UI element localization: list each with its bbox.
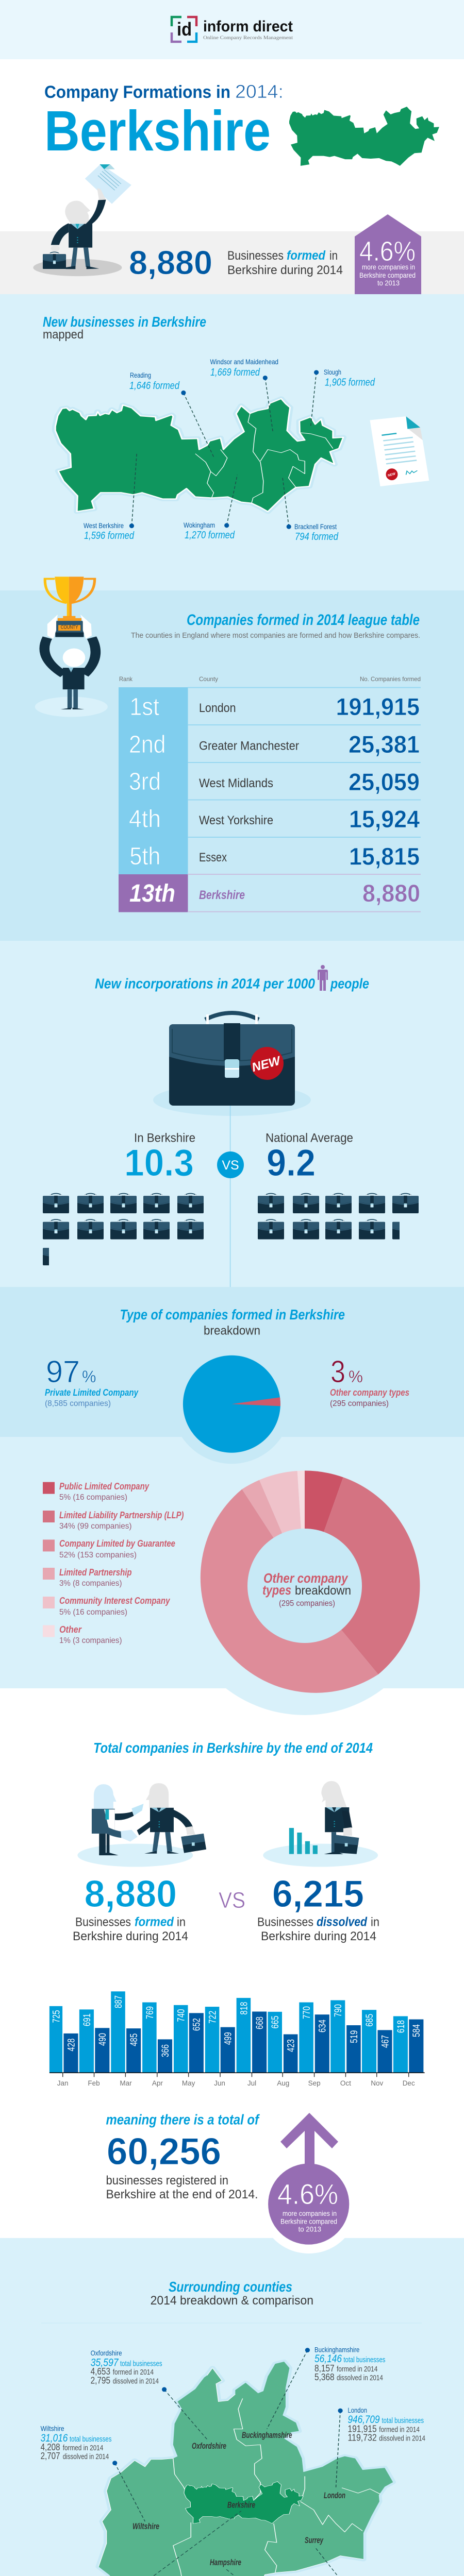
- comparison: incorporations in Berkshire vs national: 9.2: [267, 1142, 316, 1184]
- pie chart: company type split: [172, 1344, 291, 1464]
- bar chart: monthly formed and dissolved: 423: [286, 2039, 297, 2052]
- stat: formed vs dissolved: Berkshire during 2014: [73, 1929, 188, 1943]
- legend: other company types: Company Limited by Guarantee: [59, 1538, 175, 1549]
- info: London: 946,709: [347, 2414, 380, 2426]
- bar chart: monthly formed and dissolved: 722: [207, 2011, 218, 2024]
- bar chart: monthly formed and dissolved: 499: [223, 2032, 234, 2045]
- bar chart: monthly formed and dissolved: 691: [82, 2013, 93, 2026]
- map labels: districts formed counts: 1,905 formed: [325, 377, 375, 388]
- title: Berkshire: [44, 99, 271, 163]
- heading: companies formed league table: The counties in England where most companies are formed and how Berkshire compares.: [131, 631, 420, 640]
- info: Oxfordshire: formed in 2014: [113, 2368, 154, 2377]
- heading: companies formed league table: [131, 612, 420, 640]
- map: surrounding counties: [97, 2348, 393, 2576]
- info: London: formed in 2014: [379, 2426, 420, 2434]
- stat: 8,880 businesses formed: Businesses: [227, 249, 284, 263]
- table: companies formed in 2014: County: [199, 675, 218, 683]
- map labels: districts formed counts: 1,270 formed: [185, 530, 235, 541]
- map labels: districts formed counts: Bracknell Forest: [294, 522, 337, 531]
- info: Buckinghamshire: 5,368: [314, 2372, 335, 2382]
- comparison: incorporations in Berkshire vs national: National Average: [266, 1131, 353, 1145]
- info: Wiltshire: total businesses: [70, 2435, 111, 2444]
- bar chart: monthly formed and dissolved: Dec: [403, 2079, 415, 2087]
- info: Wiltshire: 4,208: [41, 2442, 60, 2452]
- bar chart: monthly formed and dissolved: 428: [66, 2039, 77, 2052]
- heading: type of companies: Type of companies formed in Berkshire: [120, 1307, 345, 1323]
- title: 2014:: [235, 81, 284, 102]
- bar chart: monthly formed and dissolved: Jan: [57, 2079, 69, 2087]
- map labels: county names: London: [324, 2490, 345, 2500]
- stat: total of 60,256: meaning there is a total of: [106, 2112, 260, 2128]
- stat: 3% other company types: [330, 1354, 409, 1408]
- stat: formed vs dissolved: Businesses: [257, 1916, 313, 1929]
- bar chart: monthly formed and dissolved: Oct: [340, 2079, 351, 2087]
- legend: other company types: [43, 1481, 184, 1645]
- bar chart: monthly formed and dissolved: May: [182, 2079, 195, 2087]
- callout: 4.6% more companies: to 2013: [377, 279, 400, 287]
- map labels: districts formed counts: Slough: [324, 368, 341, 376]
- bar chart: monthly formed and dissolved: 519: [349, 2030, 360, 2043]
- callout: 4.6% more companies: 4.6%: [359, 236, 416, 267]
- stat: 97% private limited: Private Limited Company: [45, 1387, 139, 1398]
- table: companies formed in 2014: Essex: [199, 851, 227, 865]
- table: companies formed in 2014: 3rd: [129, 768, 161, 795]
- comparison: incorporations in Berkshire vs national: [124, 1106, 353, 1287]
- callout: 4.6% more companies: [355, 214, 421, 294]
- info: Oxfordshire: dissolved in 2014: [113, 2377, 159, 2385]
- table: companies formed in 2014: 15,924: [349, 805, 420, 833]
- map labels: county names: Oxfordshire: [192, 2441, 226, 2451]
- info: Buckinghamshire: 8,157: [314, 2363, 335, 2374]
- map labels: county names: Surrey: [305, 2535, 324, 2545]
- icon: big new briefcase: [153, 1013, 311, 1116]
- map labels: county names: [132, 2430, 345, 2567]
- map labels: districts formed counts: Windsor and Maidenhead: [210, 358, 278, 366]
- legend: other company types: Limited Liability Partnership (LLP): [59, 1510, 184, 1520]
- icon: Berkshire map silhouette: [289, 107, 439, 166]
- icon: new document: [370, 416, 429, 486]
- map labels: county names: Wiltshire: [132, 2521, 159, 2531]
- stat: formed vs dissolved: [73, 1873, 379, 1943]
- info: Buckinghamshire: 56,146: [314, 2353, 342, 2365]
- stat: 8,880 businesses formed: [129, 244, 343, 281]
- table: companies formed in 2014: [119, 675, 421, 912]
- stat: 3% other company types: %: [349, 1367, 363, 1386]
- bar chart: monthly formed and dissolved: 887: [113, 1995, 124, 2008]
- heading: surrounding counties: Surrounding counties: [169, 2279, 292, 2295]
- comparison: incorporations in Berkshire vs national: 10.3: [124, 1142, 194, 1184]
- stat: 97% private limited: [45, 1354, 139, 1408]
- icon: big new briefcase: NEW: [251, 1054, 283, 1075]
- bar chart: monthly formed and dissolved: 618: [396, 2020, 407, 2033]
- comparison: incorporations in Berkshire vs national: VS: [222, 1158, 239, 1173]
- map: Berkshire districts: [55, 370, 343, 529]
- info: Oxfordshire: 2,795: [91, 2375, 110, 2385]
- table: companies formed in 2014: 13th: [129, 880, 175, 907]
- bar chart: monthly formed and dissolved: 818: [239, 2002, 250, 2015]
- info: London: London: [347, 2406, 367, 2414]
- donut chart: other company types breakdown: Other company: [263, 1570, 349, 1586]
- bar chart: monthly formed and dissolved: 652: [192, 2018, 203, 2031]
- table: companies formed in 2014: 1st: [129, 693, 159, 721]
- map labels: county names: Berkshire: [227, 2500, 255, 2510]
- stat: 3% other company types: Other company types: [330, 1387, 409, 1398]
- logo: inform direct: inform direct: [203, 18, 293, 35]
- icon: new document: NEW: [387, 472, 396, 478]
- callout: arrow 4.6% more companies: to 2013: [299, 2225, 321, 2233]
- bar chart: monthly formed and dissolved: 584: [411, 2024, 422, 2037]
- heading: new incorporations per 1000 people: people: [330, 976, 369, 991]
- info: Buckinghamshire: formed in 2014: [337, 2365, 377, 2374]
- legend: other company types: 5% (16 companies): [59, 1608, 127, 1617]
- heading: new businesses mapped: mapped: [43, 328, 84, 342]
- stat: formed vs dissolved: in: [371, 1916, 379, 1929]
- callout: 4.6% more companies: more companies in: [362, 263, 415, 271]
- bar chart: monthly formed and dissolved: Aug: [277, 2079, 289, 2087]
- stat: formed vs dissolved: dissolved: [317, 1915, 368, 1929]
- legend: other company types: Public Limited Company: [59, 1481, 150, 1492]
- map labels: districts formed counts: Reading: [130, 371, 151, 379]
- info: Buckinghamshire: dissolved in 2014: [337, 2374, 383, 2382]
- heading: new incorporations per 1000 people: [95, 965, 369, 991]
- legend: other company types: 5% (16 companies): [59, 1493, 127, 1502]
- stat: total of 60,256: [106, 2112, 260, 2201]
- table: companies formed in 2014: 191,915: [336, 693, 420, 720]
- info: Oxfordshire: 35,597: [91, 2357, 119, 2369]
- info: Buckinghamshire: total businesses: [343, 2356, 385, 2364]
- stat: 97% private limited: (8,585 companies): [45, 1399, 111, 1408]
- map labels: districts formed counts: Wokingham: [184, 521, 215, 529]
- stat: 8,880 businesses formed: 8,880: [129, 244, 212, 281]
- heading: new incorporations per 1000 people: New incorporations in 2014 per 1000: [95, 976, 315, 991]
- stat: 97% private limited: 97: [46, 1354, 80, 1389]
- table: companies formed in 2014: Berkshire: [199, 888, 245, 902]
- table: companies formed in 2014: 5th: [129, 843, 160, 870]
- stat: total of 60,256: businesses registered in: [106, 2174, 228, 2188]
- stat: total of 60,256: 60,256: [107, 2131, 221, 2173]
- bar chart: monthly formed and dissolved: 665: [270, 2015, 281, 2029]
- bar chart: monthly formed and dissolved: 769: [145, 2006, 156, 2019]
- heading: type of companies: breakdown: [204, 1324, 260, 1338]
- figure: businessman holding document: [33, 164, 131, 276]
- stat: total of 60,256: Berkshire at the end of 2014.: [106, 2188, 258, 2201]
- legend: other company types: 1% (3 companies): [59, 1636, 122, 1645]
- donut chart: other company types breakdown: breakdown: [295, 1584, 351, 1598]
- bar chart: monthly formed and dissolved: 634: [318, 2020, 328, 2032]
- legend: other company types: 34% (99 companies): [59, 1522, 132, 1531]
- legend: other company types: 3% (8 companies): [59, 1579, 122, 1588]
- info: Wiltshire: 2,707: [41, 2451, 60, 2461]
- info: London: [347, 2406, 425, 2443]
- table: companies formed in 2014: 25,381: [349, 731, 420, 758]
- bar chart: monthly formed and dissolved: 668: [255, 2016, 266, 2029]
- map labels: districts formed counts: 1,646 formed: [129, 380, 180, 392]
- stat: formed vs dissolved: Businesses: [75, 1916, 131, 1929]
- table: companies formed in 2014: 15,815: [349, 843, 420, 870]
- bar chart: monthly formed and dissolved: 467: [380, 2035, 391, 2048]
- bar chart: monthly formed and dissolved: Jun: [214, 2079, 225, 2087]
- table: companies formed in 2014: Rank: [119, 675, 133, 683]
- info: Wiltshire: dissolved in 2014: [63, 2453, 109, 2461]
- bar chart: monthly formed and dissolved: Apr: [152, 2079, 163, 2087]
- heading: surrounding counties: 2014 breakdown & comparison: [151, 2294, 313, 2308]
- figure: businessman with declining bars: [263, 1781, 378, 1867]
- stat: 3% other company types: (295 companies): [330, 1399, 389, 1408]
- bar chart: monthly formed and dissolved: 770: [302, 2006, 312, 2019]
- table: companies formed in 2014: Greater Manchester: [199, 739, 299, 753]
- stat: formed vs dissolved: formed: [135, 1915, 174, 1929]
- bar chart: monthly formed and dissolved: 740: [176, 2009, 187, 2022]
- stat: formed vs dissolved: 6,215: [272, 1873, 364, 1915]
- bar chart: monthly formed and dissolved: Nov: [371, 2079, 384, 2087]
- map labels: districts formed counts: [84, 358, 375, 543]
- table: companies formed in 2014: West Midlands: [199, 776, 273, 790]
- stat: formed vs dissolved: in: [177, 1916, 186, 1929]
- map labels: districts formed counts: 1,669 formed: [210, 367, 260, 378]
- figure: two businessmen shaking hands: [77, 1783, 206, 1867]
- logo: inform direct: [172, 17, 293, 42]
- heading: total companies: Total companies in Berkshire by the end of 2014: [93, 1740, 373, 1756]
- table: companies formed in 2014: 8,880: [362, 879, 420, 907]
- info: Wiltshire: formed in 2014: [63, 2444, 103, 2452]
- info: Buckinghamshire: Buckinghamshire: [314, 2346, 360, 2354]
- info: Buckinghamshire: [314, 2346, 385, 2382]
- bar chart: monthly formed and dissolved: 685: [364, 2014, 375, 2027]
- logo: inform direct: Online Company Records Management: [203, 36, 293, 41]
- info: London: dissolved in 2014: [379, 2434, 425, 2443]
- logo: inform direct: id: [177, 19, 192, 40]
- comparison: incorporations in Berkshire vs national: In Berkshire: [134, 1131, 195, 1145]
- info: London: total businesses: [382, 2417, 424, 2425]
- table: companies formed in 2014: London: [199, 701, 236, 715]
- figure: businessman holding county trophy: [35, 577, 108, 717]
- bar chart: monthly formed and dissolved: 366: [160, 2044, 171, 2057]
- bar chart: monthly formed and dissolved: Sep: [308, 2079, 321, 2087]
- table: companies formed in 2014: West Yorkshire: [199, 814, 273, 827]
- donut chart: other company types breakdown: types: [262, 1582, 291, 1598]
- table: companies formed in 2014: 4th: [129, 806, 161, 833]
- info: Oxfordshire: [91, 2349, 162, 2385]
- info: London: 119,732: [347, 2432, 377, 2443]
- info: Oxfordshire: total businesses: [120, 2360, 162, 2368]
- pictogram: briefcases per 1000: [43, 1193, 419, 1265]
- legend: other company types: 52% (153 companies): [59, 1551, 137, 1560]
- callout: arrow 4.6% more companies: more companies in: [283, 2209, 337, 2217]
- callout: 4.6% more companies: Berkshire compared: [359, 271, 416, 279]
- stat: 8,880 businesses formed: formed: [287, 248, 326, 263]
- stat: formed vs dissolved: VS: [219, 1888, 245, 1913]
- stat: 8,880 businesses formed: in: [329, 249, 338, 263]
- plaque label: county: COUNTY: [61, 625, 78, 631]
- donut chart: other company types breakdown: [175, 1456, 434, 1715]
- bar chart: monthly formed and dissolved: 725: [51, 2010, 62, 2023]
- bar chart: monthly formed and dissolved: Mar: [120, 2079, 132, 2087]
- map labels: districts formed counts: West Berkshire: [84, 521, 124, 530]
- bar chart: monthly formed and dissolved: 490: [97, 2033, 108, 2046]
- map labels: county names: Hampshire: [210, 2557, 241, 2567]
- legend: other company types: Limited Partnership: [59, 1567, 132, 1578]
- info: Oxfordshire: Oxfordshire: [91, 2349, 122, 2357]
- heading: new businesses mapped: New businesses in Berkshire: [43, 314, 206, 330]
- stat: 3% other company types: 3: [330, 1354, 345, 1389]
- bar chart: monthly formed and dissolved: 485: [129, 2033, 140, 2046]
- info: Oxfordshire: 4,653: [91, 2366, 110, 2377]
- legend: other company types: Community Interest Company: [59, 1596, 170, 1606]
- map labels: districts formed counts: 1,596 formed: [84, 530, 135, 541]
- legend: other company types: Other: [59, 1624, 82, 1635]
- donut chart: other company types breakdown: (295 companies): [279, 1599, 335, 1608]
- stat: 97% private limited: %: [82, 1367, 96, 1386]
- heading: new businesses mapped: [43, 314, 206, 342]
- table: companies formed in 2014: 2nd: [129, 731, 166, 758]
- info: Wiltshire: 31,016: [41, 2432, 68, 2444]
- callout: arrow 4.6% more companies: Berkshire compared: [280, 2217, 337, 2226]
- bar chart: monthly formed and dissolved: 790: [333, 2004, 344, 2017]
- map labels: districts formed counts: 794 formed: [295, 531, 339, 543]
- title: Company Formations in: [44, 82, 230, 102]
- table: companies formed in 2014: No. Companies formed: [360, 675, 421, 683]
- callout: arrow 4.6% more companies: 4.6%: [277, 2178, 338, 2210]
- bar chart: monthly formed and dissolved: Feb: [88, 2079, 100, 2087]
- map labels: county names: Buckinghamshire: [242, 2430, 292, 2440]
- stat: formed vs dissolved: 8,880: [85, 1873, 177, 1915]
- table: companies formed in 2014: 25,059: [349, 768, 420, 795]
- bar chart: monthly formed and dissolved: [49, 1991, 425, 2087]
- heading: surrounding counties: [41, 2279, 422, 2324]
- bar chart: monthly formed and dissolved: Jul: [247, 2079, 256, 2087]
- info: Wiltshire: Wiltshire: [41, 2425, 64, 2433]
- stat: 8,880 businesses formed: Berkshire during 2014: [227, 263, 343, 277]
- callout: arrow 4.6% more companies: [259, 2113, 358, 2253]
- info: Wiltshire: [41, 2425, 111, 2461]
- info: London: 191,915: [347, 2424, 377, 2434]
- stat: formed vs dissolved: Berkshire during 2014: [261, 1929, 376, 1943]
- heading: type of companies: [120, 1307, 345, 1338]
- icon: small briefcase: [43, 252, 66, 269]
